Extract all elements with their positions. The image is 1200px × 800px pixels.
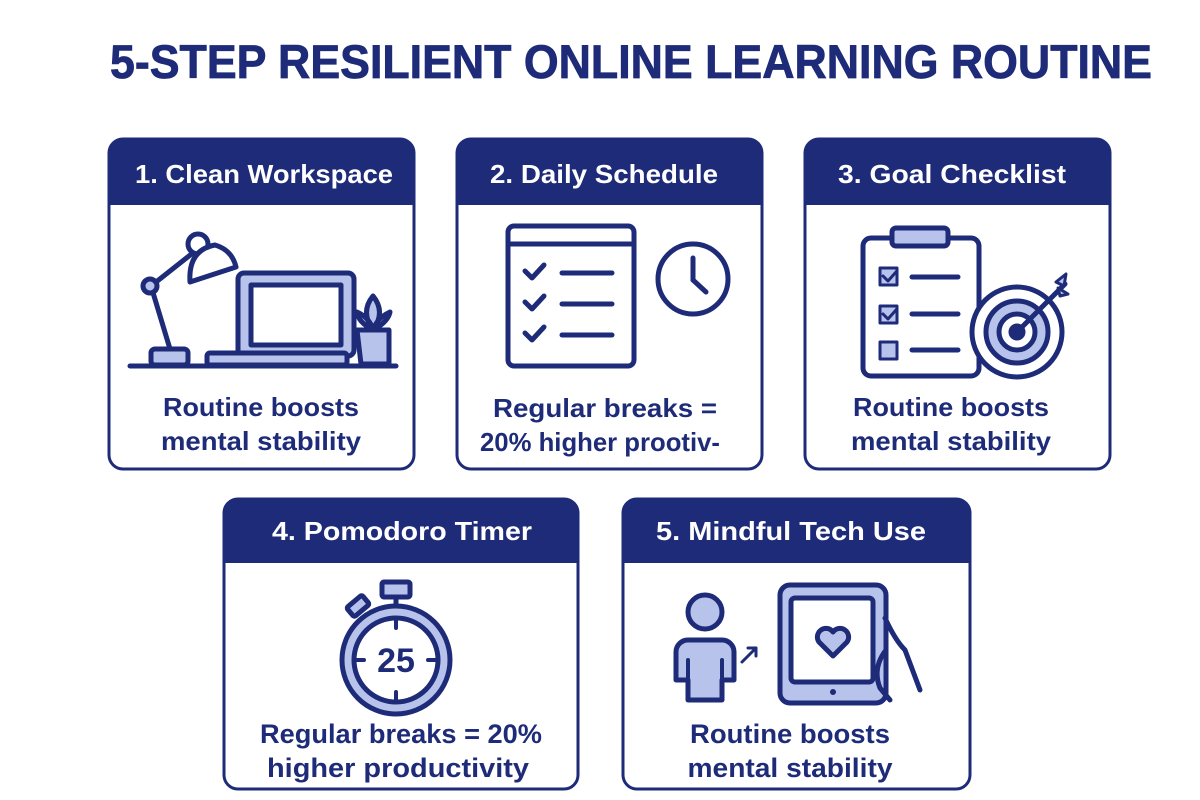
heading: 3. Goal Checklist — [838, 159, 1066, 189]
icon: desk with lamp, laptop, plant — [130, 234, 396, 366]
heading: 1. Clean Workspace — [135, 159, 393, 189]
heading: 5. Mindful Tech Use — [656, 516, 926, 546]
panel: pomodoro timer: 25 — [377, 642, 415, 680]
panel: clean workspace: mental stability — [161, 426, 362, 456]
heading: 4. Pomodoro Timer — [272, 516, 532, 546]
icon: clipboard and target — [863, 228, 1068, 377]
panel: mindful tech use: mental stability — [688, 753, 892, 783]
icon: stopwatch 25 — [342, 582, 450, 714]
text block: Regular breaks = 20% — [260, 719, 542, 749]
panel: daily schedule: 20% higher proοtiv- — [480, 427, 720, 457]
text block: Routine boosts — [163, 392, 359, 422]
icon: clock — [658, 244, 728, 314]
panel: goal checklist: mental stability — [851, 426, 1052, 456]
text block: Regular breaks = — [493, 393, 717, 423]
icon: schedule list — [508, 226, 634, 366]
title: 5-STEP RESILIENT ONLINE LEARNING ROUTINE — [110, 35, 1152, 88]
panel: pomodoro timer — [224, 499, 578, 789]
text block: Routine boosts — [853, 392, 1049, 422]
panel: daily schedule — [457, 139, 762, 469]
panel: pomodoro timer: higher productivity — [267, 753, 529, 783]
heading: 2. Daily Schedule — [490, 159, 718, 189]
panel: mindful tech use — [623, 499, 970, 789]
text block: Routine boosts — [690, 719, 890, 749]
icon: person and tablet with heart — [676, 585, 920, 703]
panel: goal checklist — [805, 139, 1110, 469]
panel: clean workspace — [109, 139, 414, 469]
